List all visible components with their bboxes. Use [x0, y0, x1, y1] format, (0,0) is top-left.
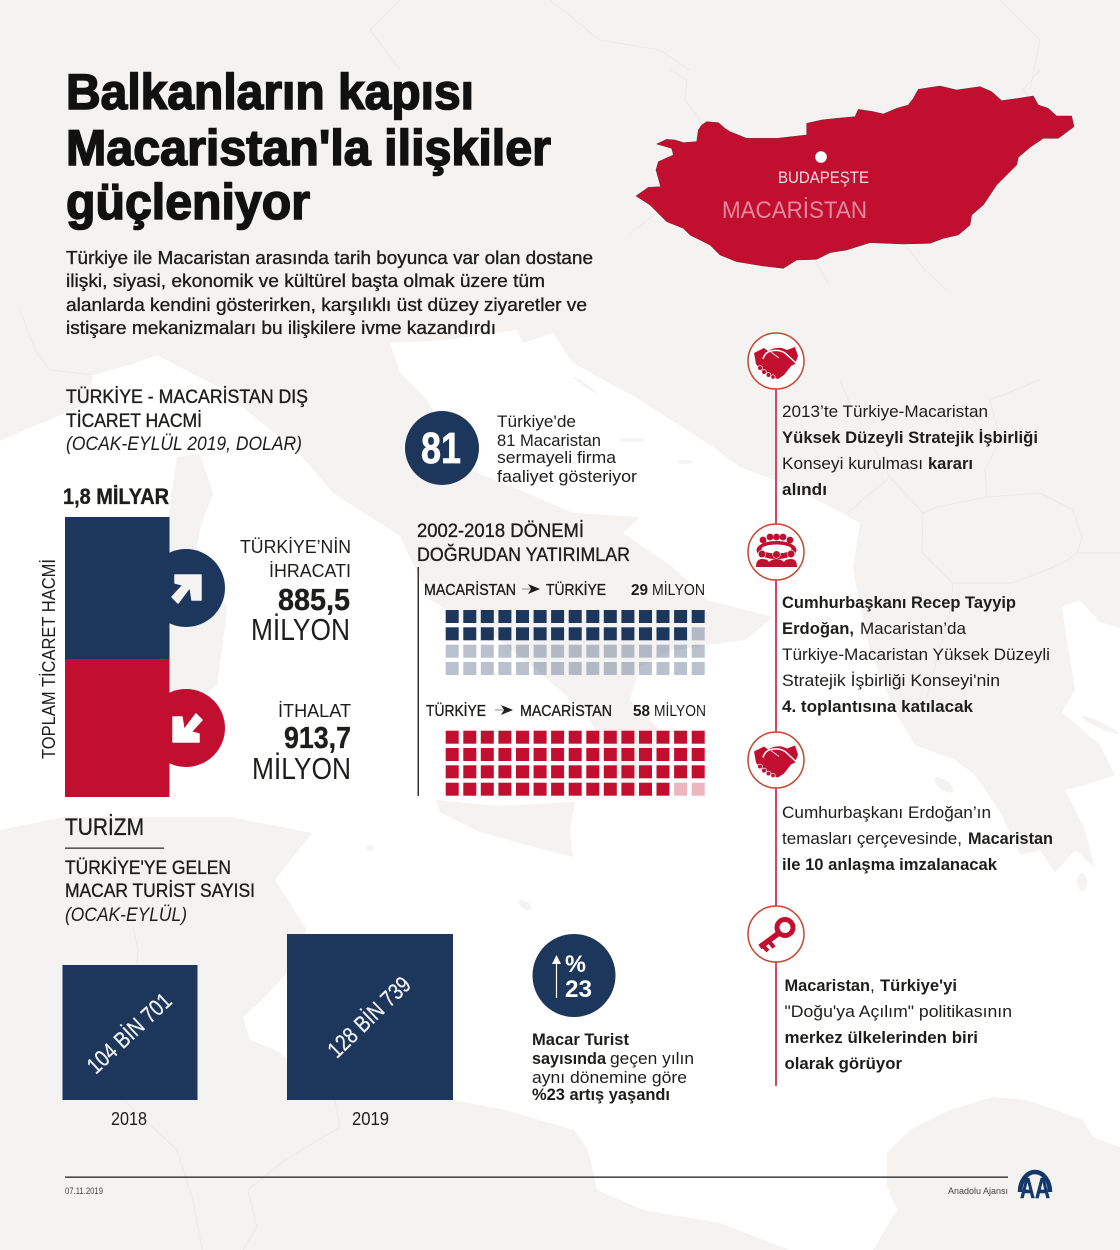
trade heading: (OCAK-EYLÜL 2019, DOLAR): [66, 434, 302, 455]
title: Macaristan'la ilişkiler: [66, 120, 551, 176]
item 2 text: Türkiye-Macaristan Yüksek Düzeyli: [782, 645, 1050, 664]
credit: Anadolu Ajansı: [948, 1186, 1008, 1197]
date: 07.11.2019: [65, 1186, 103, 1197]
import label: [252, 701, 351, 786]
intro text: alanlarda kendini gösterirken, karşılıklı üst düzey ziyaretler ve: [66, 295, 587, 315]
label: Budapeşte: BUDAPEŞTE: [778, 168, 869, 187]
item 1 text: Konseyi kurulması: [782, 454, 923, 473]
panel: tourism: [62, 814, 694, 1129]
bar 2018: 2018: [111, 1109, 147, 1129]
flow label: Hungary to Türkiye: [424, 581, 705, 599]
flow label: Hungary to Türkiye: TÜRKİYE: [546, 581, 606, 599]
export label: 885,5: [278, 582, 350, 617]
flow label: Hungary to Türkiye: MACARİSTAN: [424, 581, 516, 599]
item 1 text: 2013’te Türkiye-Macaristan: [782, 402, 988, 421]
intro text: istişare mekanizmaları bu ilişkilere ivme kazandırdı: [66, 318, 496, 338]
export label: İHRACATI: [269, 561, 351, 581]
bar 2019: 2019: [352, 1109, 389, 1129]
item 2 text: Stratejik İşbirliği Konseyi'nin: [782, 671, 1000, 690]
item 1 text: alındı: [782, 480, 827, 499]
total value: 1,8 MİLYAR: [63, 484, 169, 509]
badge: 23 percent increase: [532, 934, 616, 1017]
bar 2019: 128 BİN 739: [322, 971, 416, 1063]
badge 81: 81: [421, 424, 461, 473]
item 2 text: 4. toplantısına katılacak: [782, 697, 974, 716]
import label: MİLYON: [252, 751, 351, 786]
item 4 text: "Doğu'ya Açılım" politikasının: [784, 1002, 1012, 1021]
export block: [65, 517, 225, 659]
firms text: [497, 412, 637, 486]
flow label: Türkiye to Hungary: TÜRKİYE: [426, 702, 486, 720]
import label: 913,7: [284, 720, 351, 755]
item 4 text: olarak görüyor: [784, 1054, 902, 1073]
item 3 text: temasları çerçevesinde,: [782, 829, 962, 848]
badge: 23 percent increase: %: [565, 951, 586, 978]
trade heading: [66, 387, 308, 455]
flow label: Hungary to Türkiye: 29: [631, 582, 648, 599]
timeline: [748, 333, 1053, 1086]
flow label: Türkiye to Hungary: 58: [633, 703, 650, 720]
export label: MİLYON: [251, 612, 350, 647]
callout: 81 firms: [405, 411, 637, 486]
label: Macaristan: MACARİSTAN: [722, 197, 867, 224]
item 1 text: Yüksek Düzeyli Stratejik İşbirliği: [782, 428, 1038, 447]
flow label: Türkiye to Hungary: [426, 702, 706, 720]
trade heading: TİCARET HACMİ: [66, 411, 202, 432]
increase text: [532, 1030, 694, 1104]
panel: foreign trade: [39, 387, 351, 797]
item 3 text: Cumhurbaşkanı Erdoğan’ın: [782, 803, 991, 822]
panel: direct investments: [417, 521, 706, 796]
tourism heading: [65, 814, 255, 926]
timeline item 4: [748, 906, 1012, 1073]
timeline item 3: [748, 732, 1053, 874]
item 2 text: [782, 593, 1050, 716]
item 3 text: Macaristan: [968, 829, 1053, 848]
title: güçleniyor: [66, 174, 310, 230]
intro text: [66, 248, 593, 338]
firms text: sermayeli firma: [497, 448, 617, 467]
intro text: ilişki, siyasi, ekonomik ve kültürel başta olmak üzere tüm: [66, 271, 545, 291]
icon: arrow up right: [172, 575, 201, 603]
icon: arrow down left: [173, 714, 202, 742]
item 4 text: ,: [870, 976, 875, 995]
increase text: aynı dönemine göre: [532, 1068, 687, 1087]
increase text: geçen yılın: [610, 1049, 694, 1068]
import label: İTHALAT: [278, 701, 351, 721]
firms text: 81 Macaristan: [497, 431, 601, 450]
increase text: Macar Turist: [532, 1030, 629, 1049]
bar 2019: [287, 934, 453, 1129]
vertical axis label: TOPLAM TİCARET HACMİ: [39, 559, 59, 759]
import block: [65, 659, 225, 797]
title: [66, 64, 551, 230]
investments heading: 2002-2018 DÖNEMİ: [417, 521, 584, 542]
timeline item 1: [748, 333, 1038, 499]
increase text: %23 artış yaşandı: [532, 1085, 670, 1104]
item 4 text: Macaristan: [784, 976, 870, 995]
increase text: sayısında: [532, 1049, 607, 1068]
waffle chart: 29 million: [446, 610, 705, 675]
tourism heading: (OCAK-EYLÜL): [65, 905, 187, 926]
tourism heading: TURİZM: [65, 814, 144, 841]
flow label: Türkiye to Hungary: MİLYON: [654, 702, 706, 720]
title: Balkanların kapısı: [66, 64, 474, 120]
Budapest marker: [815, 151, 827, 163]
flow label: Hungary to Türkiye: MİLYON: [652, 581, 705, 599]
flow label: Türkiye to Hungary: MACARİSTAN: [520, 702, 612, 720]
export label: TÜRKİYE’NİN: [240, 537, 351, 557]
icon: handshake: [748, 333, 804, 389]
icon: key: [748, 906, 804, 962]
trade heading: TÜRKİYE - MACARİSTAN DIŞ: [66, 387, 308, 408]
tourism heading: MACAR TURİST SAYISI: [65, 881, 255, 902]
item 2 text: Erdoğan,: [782, 619, 854, 638]
investments heading: [417, 521, 630, 566]
waffle chart: 58 million: [446, 731, 705, 796]
badge 81: [405, 411, 479, 485]
item 4 text: Türkiye'yi: [880, 976, 957, 995]
item 1 text: kararı: [928, 454, 973, 473]
Hungary shape: [636, 86, 1074, 268]
badge: 23 percent increase: 23: [565, 976, 592, 1003]
investments heading: DOĞRUDAN YATIRIMLAR: [417, 544, 630, 566]
item 3 text: [782, 803, 1053, 874]
timeline item 2: [748, 524, 1050, 716]
item 4 text: [784, 976, 1012, 1073]
intro text: Türkiye ile Macaristan arasında tarih boyunca var olan dostane: [66, 248, 593, 268]
map: Hungary: [636, 86, 1074, 268]
item 4 text: merkez ülkelerinden biri: [784, 1028, 978, 1047]
bar 2018: 104 BİN 701: [81, 987, 177, 1079]
firms text: faaliyet gösteriyor: [497, 467, 637, 486]
icon: meeting group: [748, 524, 804, 580]
logo: Anadolu Agency: AA: [1020, 1173, 1050, 1205]
item 1 text: [782, 402, 1038, 499]
item 3 text: ile 10 anlaşma imzalanacak: [782, 855, 998, 874]
firms text: Türkiye'de: [497, 412, 576, 431]
item 2 text: Cumhurbaşkanı Recep Tayyip: [782, 593, 1016, 612]
tourism heading: TÜRKİYE'YE GELEN: [65, 858, 231, 879]
icon: handshake: [748, 732, 804, 788]
bar 2018: [62, 965, 198, 1129]
footer: [65, 1172, 1050, 1205]
item 2 text: Macaristan’da: [860, 619, 967, 638]
export label: [240, 537, 351, 647]
